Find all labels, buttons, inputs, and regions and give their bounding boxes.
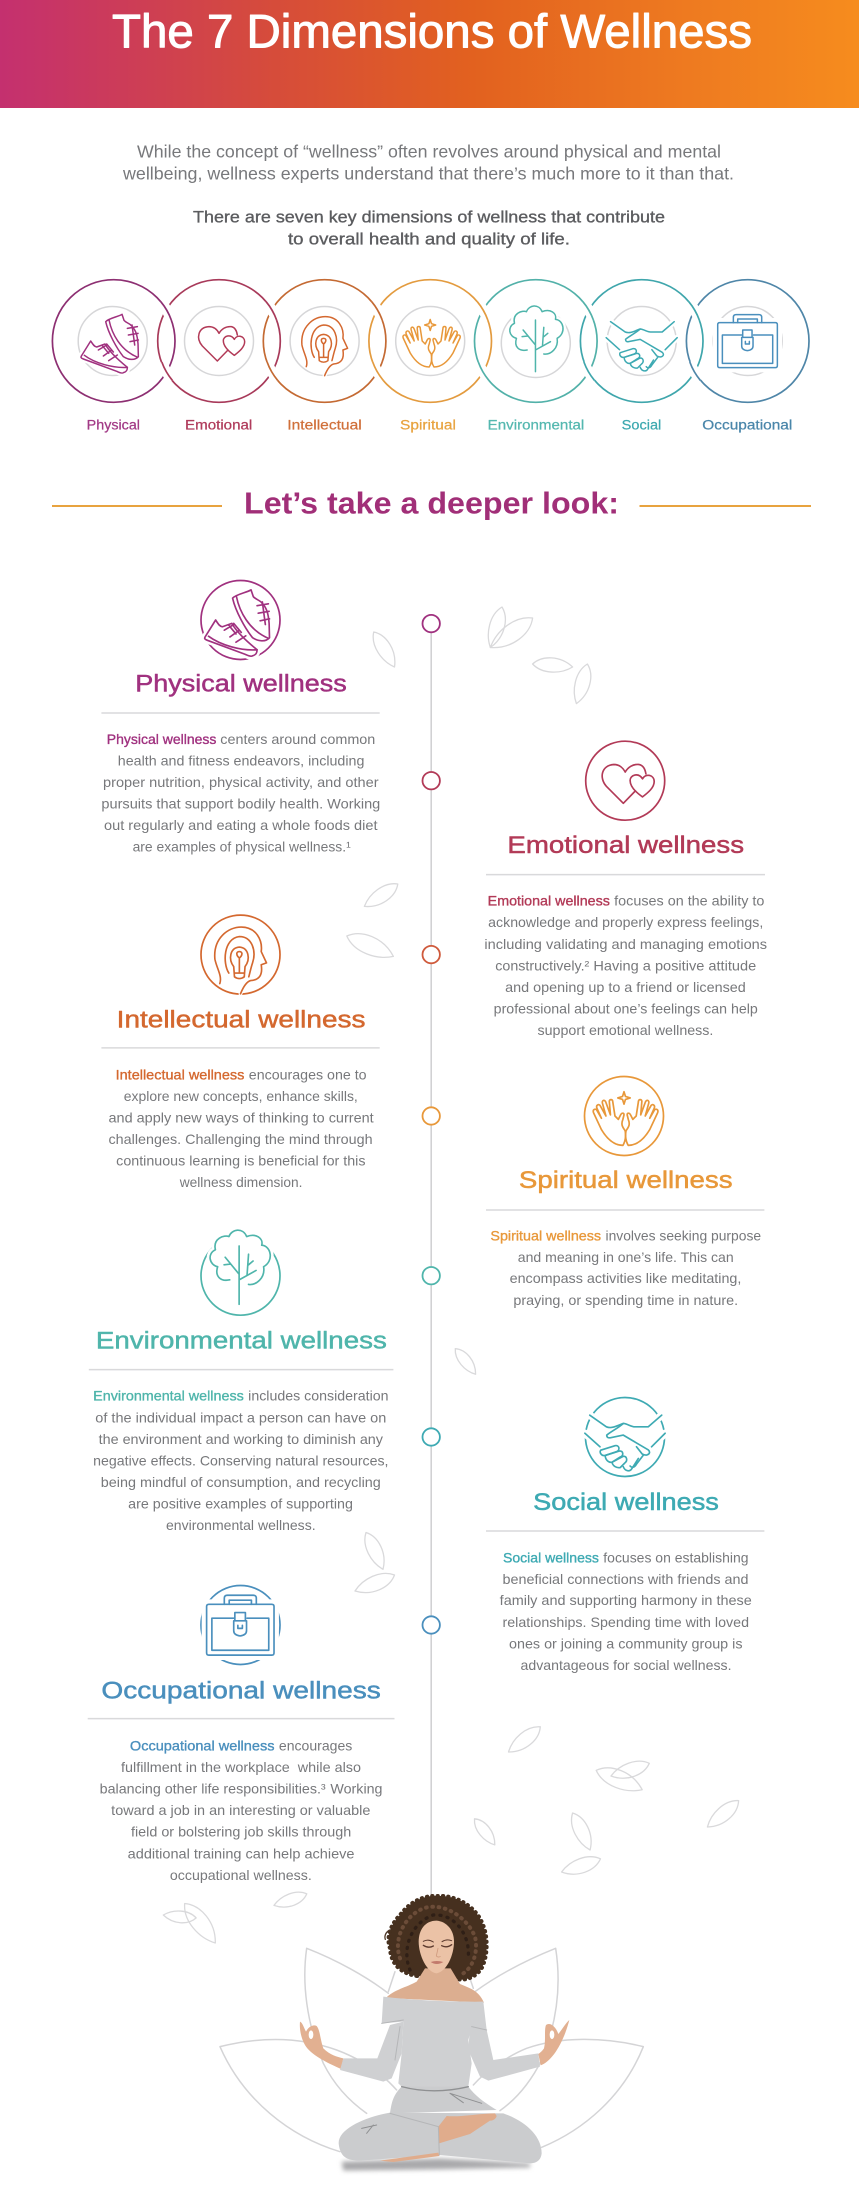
- body: social: family and supporting harmony in these: [500, 1592, 752, 1608]
- body: occupational: toward a job in an interesting or valuable: [111, 1802, 371, 1818]
- ring labels: Intellectual: [287, 418, 362, 432]
- body: environmental: are positive examples of supporting: [128, 1496, 353, 1512]
- heading: environmental: Environmental wellness: [96, 1328, 387, 1355]
- icon: social: [585, 1398, 665, 1476]
- body: occupational: Occupational wellness: [130, 1737, 274, 1753]
- icon: hands: [403, 320, 460, 367]
- body: emotional: acknowledge and properly express feelings,: [488, 914, 763, 930]
- icon: intellectual: [201, 915, 280, 994]
- icon: physical: [201, 580, 280, 660]
- body: environmental: Environmental wellness: [93, 1388, 244, 1404]
- seven dimensions ring chain: [52, 280, 809, 402]
- intro emphasis: [193, 207, 665, 248]
- body: intellectual: explore new concepts, enhance skills,: [124, 1088, 358, 1104]
- body: intellectual: and apply new ways of thinking to current: [108, 1110, 374, 1126]
- hair: [385, 1896, 487, 1980]
- body: intellectual: wellness dimension.: [179, 1174, 302, 1190]
- body: social: ones or joining a community group is: [509, 1636, 742, 1652]
- hands: [300, 2020, 569, 2069]
- feet: [380, 2113, 497, 2162]
- panel: intellectual wellness: [101, 915, 380, 1190]
- body: spiritual: encompass activities like meditating,: [510, 1270, 741, 1286]
- clothing folds: [362, 2087, 482, 2133]
- body: emotional: constructively.²: [495, 957, 590, 973]
- body: physical: proper nutrition, physical activity, and other: [103, 774, 379, 790]
- body: spiritual: and meaning in one’s life. This can: [518, 1249, 734, 1265]
- timeline dots: [422, 615, 440, 1634]
- body: spiritual: [490, 1227, 761, 1308]
- panel: spiritual wellness: [486, 1076, 764, 1308]
- decorative leaves: [163, 605, 744, 1948]
- body: emotional: focuses on the ability to: [614, 893, 765, 909]
- body: intellectual: challenges. Challenging the mind through: [108, 1131, 373, 1147]
- body: occupational: field or bolstering job skills through: [131, 1824, 351, 1840]
- body: emotional: professional about one’s feelings can help: [494, 1001, 758, 1017]
- ring labels: Physical: [87, 418, 140, 432]
- body: emotional: and opening up to a friend or licensed: [505, 979, 746, 995]
- lotus petals: [220, 1948, 643, 2152]
- timeline: [422, 615, 440, 1896]
- body: spiritual: praying, or spending time in nature.: [513, 1292, 738, 1308]
- icon: emotional: [586, 741, 665, 820]
- ring labels: Emotional: [185, 418, 252, 432]
- body: environmental: the environment and working to diminish any: [99, 1431, 383, 1447]
- body: occupational: additional training can help achieve: [128, 1845, 355, 1861]
- intro paragraph: [122, 142, 734, 183]
- body: occupational: balancing other life responsibilities.³: [100, 1780, 326, 1796]
- body: social: focuses on establishing: [603, 1550, 748, 1566]
- icon: spiritual: [584, 1076, 664, 1156]
- body: intellectual: [108, 1066, 374, 1190]
- body: environmental: of the individual impact a person can have on: [95, 1410, 386, 1426]
- body: physical: [101, 731, 380, 855]
- body: environmental: environmental wellness.: [166, 1517, 316, 1533]
- neck and shoulders: [386, 1968, 484, 2003]
- sweater: [340, 1997, 540, 2090]
- body: occupational: [100, 1737, 382, 1883]
- body: intellectual: Intellectual wellness: [116, 1066, 244, 1082]
- icon: handshake: [606, 322, 677, 371]
- icon: shoes: [81, 314, 138, 373]
- heading: spiritual: Spiritual wellness: [519, 1167, 733, 1194]
- body: physical: out regularly and eating a whole foods diet: [104, 817, 378, 833]
- panel: emotional wellness: [484, 741, 767, 1038]
- body: emotional: Having a positive attitude: [593, 957, 756, 973]
- body: environmental: being mindful of consumption, and recycling: [101, 1474, 381, 1490]
- body: occupational: fulfillment in the workplace while also: [121, 1759, 361, 1775]
- panel: occupational wellness: [88, 1586, 394, 1883]
- trousers: [339, 2087, 542, 2163]
- meditating woman on lotus: [220, 1896, 643, 2171]
- heading: occupational: Occupational wellness: [101, 1677, 381, 1704]
- body: social: Social wellness: [503, 1550, 599, 1566]
- ring labels: Occupational: [702, 418, 792, 432]
- body: environmental: includes consideration: [248, 1388, 388, 1404]
- heading: emotional: Emotional wellness: [507, 832, 744, 859]
- intro emphasis: to overall health and quality of life.: [288, 229, 570, 248]
- panel: social wellness: [486, 1398, 764, 1673]
- body: physical: centers around common: [220, 731, 375, 747]
- ring labels: Environmental: [488, 418, 584, 432]
- panel: physical wellness: [101, 580, 380, 855]
- panel: environmental wellness: [89, 1230, 393, 1533]
- body: occupational: encourages: [279, 1737, 352, 1753]
- body: intellectual: continuous learning is beneficial for this: [116, 1153, 366, 1169]
- body: emotional: [484, 893, 767, 1038]
- face: [419, 1921, 454, 1973]
- heading: deeper look: Let’s take a deeper look:: [244, 486, 619, 521]
- body: social: advantageous for social wellness.: [520, 1657, 732, 1673]
- body: occupational: occupational wellness.: [170, 1867, 312, 1883]
- icon: environmental: [201, 1230, 280, 1315]
- ring interlocks: [161, 302, 700, 380]
- icon: occupational: [201, 1586, 280, 1664]
- icon: briefcase: [718, 315, 777, 368]
- body: spiritual: Spiritual wellness: [490, 1227, 601, 1243]
- ring labels: Social: [622, 418, 661, 432]
- title: The 7 Dimensions of Wellness: [112, 5, 752, 58]
- body: emotional: including validating and managing emotions: [484, 936, 767, 952]
- body: spiritual: involves seeking purpose: [606, 1227, 761, 1243]
- body: physical: are examples of physical wellness.¹: [133, 839, 351, 855]
- floor shadow: [342, 2158, 530, 2171]
- icon: head with bulb: [302, 317, 348, 376]
- header banner: [0, 0, 859, 108]
- body: emotional: support emotional wellness.: [538, 1022, 713, 1038]
- icon: hearts: [199, 327, 245, 361]
- body: emotional: Emotional wellness: [488, 893, 610, 909]
- body: intellectual: encourages one to: [249, 1066, 367, 1082]
- body: physical: Physical wellness: [107, 731, 216, 747]
- body: physical: pursuits that support bodily health. Working: [101, 796, 380, 812]
- body: occupational: Working: [330, 1780, 382, 1796]
- icon: tree: [510, 306, 563, 372]
- intro paragraph: While the concept of “wellness” often revolves around physical and mental: [137, 142, 721, 162]
- heading: intellectual: Intellectual wellness: [117, 1006, 366, 1034]
- body: physical: health and fitness endeavors, including: [118, 752, 364, 768]
- intro emphasis: There are seven key dimensions of wellness that contribute: [193, 207, 665, 226]
- finger rings: [309, 2030, 554, 2039]
- heading: physical: Physical wellness: [135, 670, 347, 697]
- body: environmental: negative effects. Conserving natural resources,: [93, 1452, 388, 1468]
- body: social: beneficial connections with friends and: [502, 1571, 748, 1587]
- ring labels: [87, 418, 792, 432]
- body: social: [500, 1550, 752, 1673]
- heading: social: Social wellness: [533, 1489, 719, 1516]
- ring labels: Spiritual: [400, 418, 456, 432]
- outer rings: [52, 280, 809, 402]
- facial features: [423, 1940, 452, 1964]
- inner grey rings: [78, 306, 782, 378]
- body: environmental: [93, 1388, 388, 1533]
- intro paragraph: wellbeing, wellness experts understand that there’s much more to it than that.: [122, 163, 734, 183]
- body: social: relationships. Spending time with loved: [502, 1614, 749, 1630]
